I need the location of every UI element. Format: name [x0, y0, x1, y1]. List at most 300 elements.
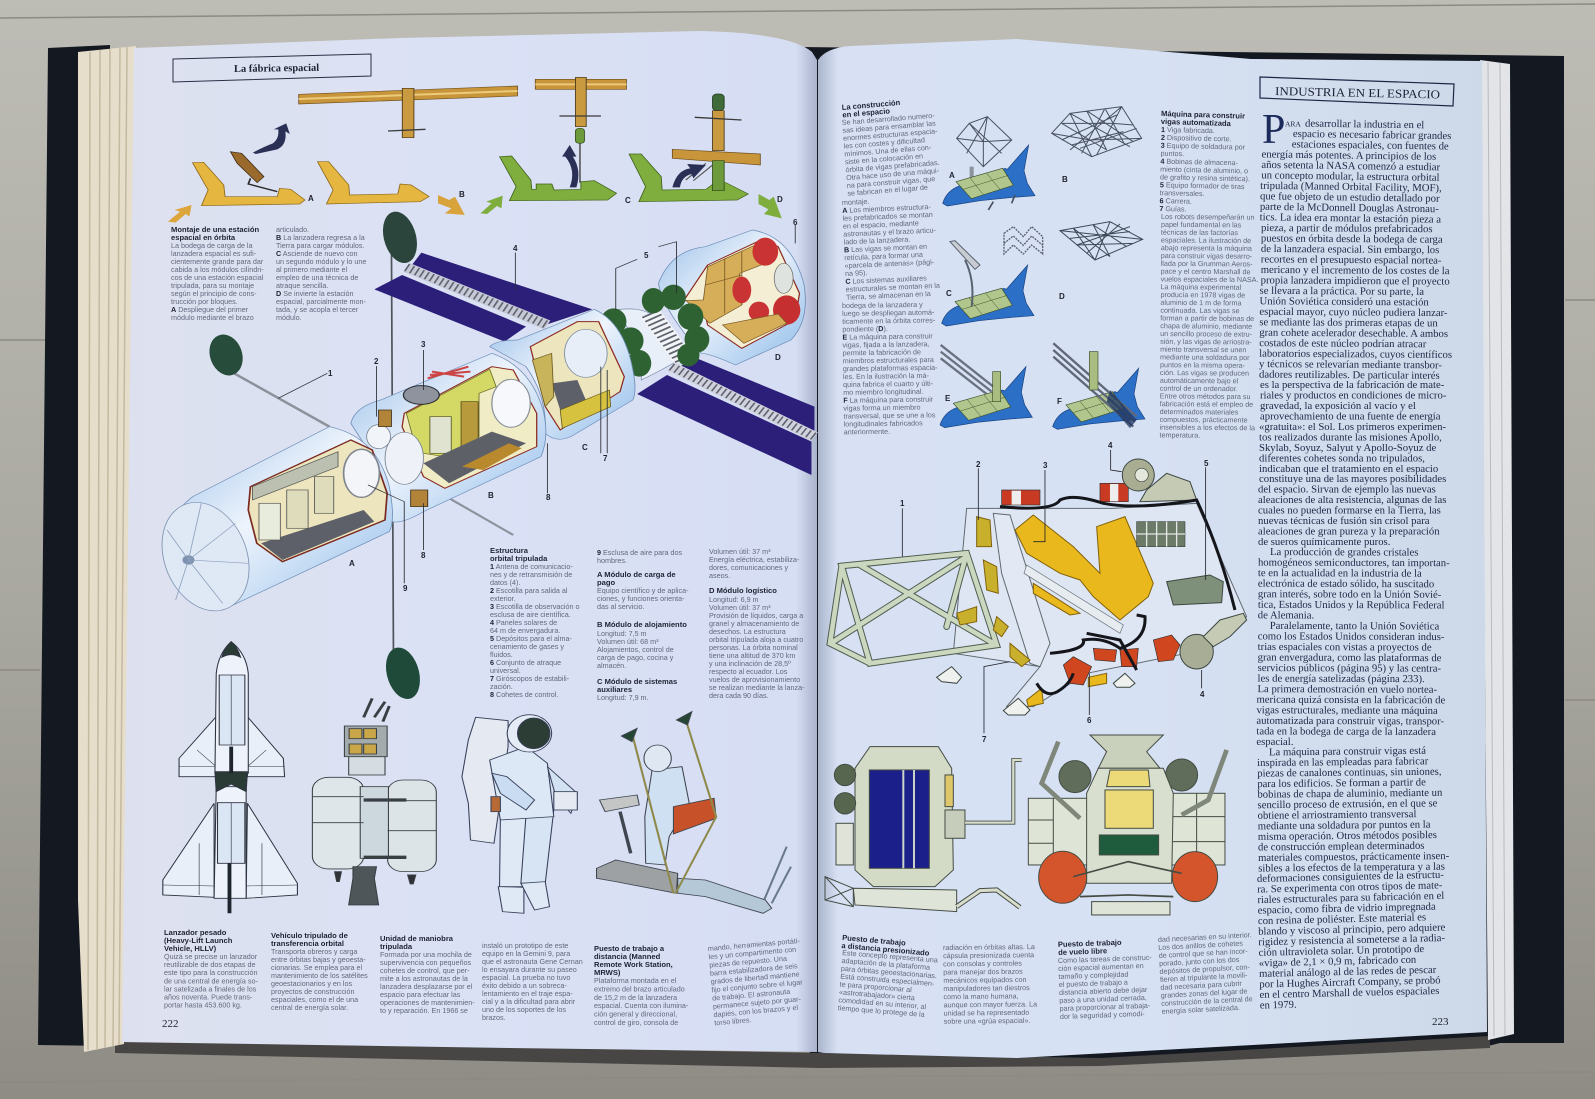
main article text: Skylab, Soyuz, Salyut y Apollo-Soyuz de	[1259, 442, 1436, 454]
station part labels: 3	[421, 340, 426, 349]
text block: Máquina para construir vigas automatizada: puntos en la misma opera-	[1160, 360, 1246, 370]
drop cap: P	[1262, 107, 1285, 153]
column bottom: tica, Estados Unidos y la República Federal	[1258, 599, 1445, 611]
caption: Vehículo tripulado: mantenimiento de los satélites	[271, 971, 368, 980]
text block: Montaje de una estación espacial en órbita: según el principio de cons-	[171, 289, 257, 298]
text block: Estructura orbital tripulada: nes y de retransmisión de	[490, 570, 572, 579]
caption: Lanzador pesado: reutilizable de dos etapas de	[164, 960, 256, 969]
caption: Unidad de maniobra tripulada: lo ensayara durante su paseo	[482, 965, 577, 974]
machine part labels: 6	[1087, 716, 1092, 725]
text block: La construcción en el espacio: lado de la lanzadera.	[843, 235, 910, 246]
column top: parte de la McDonnell Douglas Astronau-	[1260, 201, 1439, 215]
labels of construction methods: F	[1057, 397, 1062, 406]
caption: Puesto de trabajo a distancia: control de giro, consola de	[594, 1018, 678, 1027]
caption: Vehículo tripulado: proyectos de construcción	[271, 987, 355, 996]
column top: ARA	[1285, 119, 1302, 129]
main article text: «gratuita»: el Sol. Los primeros experimen-	[1259, 421, 1446, 433]
text block: La construcción en el espacio: na para construir vigas, que	[846, 174, 936, 190]
text block: La construcción en el espacio: Tierra, se almacenan en la	[846, 289, 931, 302]
text block: módulos A B C: das al servicio.	[597, 602, 645, 611]
caption: Puesto de trabajo a distancia presionizado: radiación en órbitas altas. La	[943, 942, 1035, 952]
text block: Máquina para construir vigas automatizada: para construir vigas desarro-	[1161, 251, 1253, 261]
text block: módulo D: Longitud: 6,9 m	[709, 595, 759, 604]
column bottom: vigas estructurales, mediante una máquina	[1256, 704, 1438, 717]
column top: años setenta la NASA comenzó a estudiar	[1261, 159, 1441, 173]
caption: Puesto de trabajo a distancia: de 15,2 m de la lanzadera	[594, 993, 677, 1002]
caption: Puesto de trabajo de vuelo libre: depósitos de propulsor, con-	[1159, 962, 1251, 976]
main article text: del espacio. Sirvan de ejemplo las nuevas	[1258, 484, 1436, 496]
caption: Unidad de maniobra tripulada: cohetes de control, que per-	[380, 966, 470, 975]
grid panel	[1137, 522, 1185, 547]
text block: La construcción en el espacio: B Las vigas se montan en	[844, 242, 927, 254]
text block: módulo D: Volumen útil: 37 m³	[709, 603, 771, 612]
caption: Puesto de trabajo a distancia: mando, herramientas portáti-	[707, 936, 801, 953]
text block: Montaje de una estación espacial en órbita: D Se invierte la estación	[276, 289, 354, 298]
text block: La construcción en el espacio: permite la fabricación de	[843, 347, 921, 357]
right page	[818, 39, 1487, 1058]
text block: Máquina para construir vigas automatizada: forman a partir de bobinas de	[1160, 313, 1254, 323]
text block: Montaje de una estación espacial en órbita: cientemente grande para dar	[171, 257, 264, 266]
column bottom: espacial.	[1256, 736, 1293, 748]
station part labels: D	[775, 353, 781, 362]
heavy-lift launch vehicle	[163, 642, 297, 913]
text block: Estructura orbital tripulada: Estructura	[490, 546, 529, 555]
text block: La construcción en el espacio: na 95).	[845, 268, 868, 278]
text block: La construcción en el espacio: Otra hace uso de una máqui-	[846, 166, 940, 182]
text block: Máquina para construir vigas automatizada: vuelos espaciales de la NASA.	[1161, 274, 1259, 284]
text block: Montaje de una estación espacial en órbita: módulo mediante el brazo	[171, 313, 254, 322]
caption: Puesto de trabajo de vuelo libre: Los dos anillos de cohetes	[1158, 939, 1244, 952]
labels of assembly sequence: D	[777, 195, 783, 204]
main article text: rigidez y resistencia al someterse a la radia-	[1258, 932, 1446, 948]
text block: La construcción en el espacio: mínimos. Una de ellas con-	[844, 143, 932, 158]
text block: Máquina para construir vigas automatizada: vigas automatizada	[1161, 117, 1232, 128]
mast and dishes	[205, 210, 513, 701]
text block: La construcción en el espacio: F La máquina para construir	[843, 395, 933, 405]
text block: módulo D: dores, comunicaciones y	[709, 563, 789, 572]
text block: Estructura orbital tripulada: orbital tripulada	[490, 554, 548, 563]
A: tetrahedral structure	[943, 117, 1035, 210]
text block: módulo D: Energía eléctrica, estabiliza-	[709, 555, 800, 564]
caption: Puesto de trabajo a distancia presionizado: cápsula presionizada cuenta	[943, 950, 1034, 960]
machine part labels	[900, 441, 1209, 744]
B: assembled lattice	[1052, 107, 1142, 157]
column bottom: mericana quizá consista en la fabricación de	[1256, 694, 1445, 706]
caption: Puesto de trabajo a distancia presionizado: a distancia presionizado	[841, 941, 930, 958]
machine part labels: 4	[1200, 690, 1205, 699]
labels of construction methods: E	[945, 394, 951, 403]
caption: Vehículo tripulado: Vehículo tripulado de	[271, 931, 348, 940]
text block: La construcción en el espacio: pondiente (D).	[842, 324, 888, 334]
station part labels: 9	[403, 584, 408, 593]
caption: Unidad de maniobra tripulada: lentamiento en el traje espa-	[482, 989, 573, 998]
F: beam machine with transversal	[1053, 343, 1145, 429]
machine frame and panels	[953, 503, 1247, 707]
text block: Estructura orbital tripulada: exterior.	[490, 594, 516, 603]
text block: La construcción en el espacio: miembros estructurales para	[843, 355, 934, 365]
text block: módulos A B C	[597, 548, 689, 702]
arrows	[168, 123, 782, 223]
text block: módulos A B C: Longitud: 7,9 m.	[597, 693, 649, 702]
text block: Estructura orbital tripulada: cenamiento de gases y	[490, 642, 564, 651]
text block: módulos A B C: Longitud: 7,5 m	[597, 629, 647, 638]
caption: Puesto de trabajo de vuelo libre: Como las tareas de construc-	[1058, 953, 1152, 965]
main article text: por la Hughes Aircraft Company, se probó	[1259, 974, 1441, 990]
caption: Unidad de maniobra tripulada: éxito debido a un sobreca-	[482, 981, 567, 990]
column bottom: trias espaciales con vistas a proyectos de	[1258, 641, 1432, 654]
solar panels	[374, 253, 814, 475]
text block: Montaje de una estación espacial en órbita: tripulada, para su montaje	[171, 281, 254, 290]
text block: Montaje de una estación espacial en órbita: trucción por bloques.	[171, 297, 238, 306]
caption: Puesto de trabajo a distancia: Puesto de trabajo a	[594, 944, 665, 953]
lower red boxes	[1063, 635, 1180, 685]
right page heading: Industria en el espacio	[1260, 77, 1454, 106]
page number 223: 223	[1432, 1016, 1449, 1028]
caption: Unidad de maniobra tripulada: que el astronauta Gene Cernan	[482, 957, 583, 966]
text block: La construcción en el espacio: vigas forma un miembro	[843, 403, 921, 413]
column top: tripulada (Manned Orbital Facility, MOF),	[1260, 180, 1442, 194]
main article text: diferentes cohetes sonda no tripulados,	[1259, 452, 1425, 464]
machine part labels: 4	[1108, 441, 1113, 450]
main article text: aleaciones de gran pureza y la preparación	[1258, 526, 1440, 538]
column top: energía más potentes. A principios de los	[1262, 148, 1436, 163]
caption: Puesto de trabajo de vuelo libre: grandes zonas del lugar de	[1161, 986, 1248, 1000]
caption: Puesto de trabajo de vuelo libre: ción espacial aumentan en	[1058, 961, 1144, 973]
column bottom: de Alemania.	[1258, 609, 1314, 621]
main article text: obtiene el arriostramiento transversal	[1258, 808, 1416, 822]
main article text: aleaciones de alta resistencia, algunas de las	[1258, 494, 1446, 506]
main article text: riales y productos en condiciones de micro-	[1260, 389, 1447, 401]
text block: Máquina para construir vigas automatizada: sión, y las vigas de arriostra-	[1160, 337, 1252, 346]
feet	[937, 667, 1135, 715]
box 5	[1167, 575, 1223, 605]
caption: Unidad de maniobra tripulada: espacio para efectuar las	[380, 990, 461, 999]
text block: módulo D: desechos. La estructura	[709, 627, 786, 636]
column top: tics. La idea era montar la estación pieza a	[1260, 211, 1441, 226]
column bottom: gran interés, sobre todo en la Unión Sovié-	[1258, 588, 1442, 601]
illustration: assembly sequence of shuttles and station	[168, 77, 782, 223]
column top: un concepto modular, la estructura orbital	[1261, 169, 1440, 184]
text block: La construcción en el espacio: siste en la colocación en	[845, 151, 923, 166]
caption: Puesto de trabajo de vuelo libre: fieren al tripulante la movili-	[1160, 970, 1248, 984]
main article text	[1256, 107, 1453, 1012]
text block: La construcción en el espacio: grandes plataformas espacia-	[843, 363, 938, 373]
caption: Lanzador pesado: Vehicle, HLLV)	[164, 944, 217, 953]
caption: Puesto de trabajo a distancia presionizado: para órbitas geoestacionarias.	[841, 964, 937, 980]
caption: Puesto de trabajo a distancia: fijo el conjunto sobre el lugar	[711, 977, 804, 994]
main article text: nuevas técnicas de fusión sin crisol para	[1258, 515, 1430, 527]
main article text: indicaban que el tratamiento en el espacio	[1259, 463, 1438, 475]
main article text: constituye una de las mayores posibilidades	[1259, 473, 1446, 485]
caption: Puesto de trabajo de vuelo libre: el puesto de trabajo a	[1059, 978, 1128, 989]
text block: Estructura orbital tripulada: esclusa de aire científica.	[490, 610, 571, 619]
text block: módulo D: D Módulo logístico	[709, 586, 777, 595]
text block: La construcción en el espacio: A Los miembros estructura-	[842, 202, 931, 215]
caption: Puesto de trabajo a distancia presionizado: mecánicos equipados con	[943, 975, 1026, 985]
caption: Puesto de trabajo a distancia: les y un compartimento con	[708, 945, 796, 961]
main article text: piezas de canalones continuas, sin uniones,	[1257, 766, 1442, 780]
text block: La construcción en el espacio: sas ideas para ensamblar las	[842, 119, 936, 135]
machine part labels: 2	[976, 460, 981, 469]
text block: Montaje de una estación espacial en órbita: al primero mediante el	[276, 265, 348, 274]
main article text: «viga» de 2,1 × 0,9 m, fabricado con	[1259, 954, 1417, 969]
text block: La construcción en el espacio: La construcción	[841, 98, 901, 112]
text block: Montaje de una estación espacial en órbita: tada, y se acopla el tercer	[276, 305, 359, 314]
text block: Máquina para construir vigas automatizada: 6 Carrera.	[1159, 196, 1192, 206]
text block: Montaje de una estación espacial en órbita: A Despliegue del primer	[171, 305, 248, 314]
caption: Puesto de trabajo a distancia presionizado: Este concepto representa una	[842, 948, 938, 965]
text block: Máquina para construir vigas automatizada: Los robots desempeñarán un	[1161, 212, 1255, 222]
main article text: se llevara a la práctica. Por su parte, la	[1260, 285, 1424, 298]
left page	[122, 31, 817, 1052]
caption: Unidad de maniobra tripulada: supervivencia con pequeños	[380, 958, 472, 967]
text block: Máquina para construir vigas automatizada: espaciales. La ilustración de	[1161, 235, 1251, 245]
text block: La construcción en el espacio: enormes estructuras espacia-	[843, 126, 938, 143]
text block: Máquina para construir vigas automatizada: continuada. Las vigas se	[1160, 306, 1240, 315]
caption: Lanzador pesado: de una central de energía so-	[164, 976, 259, 985]
text block: Montaje de una estación espacial en órbita: articulado.	[276, 225, 309, 234]
text block: La construcción en el espacio: les prefabricados se montan	[842, 210, 933, 223]
labels of construction methods: D	[1059, 292, 1065, 301]
main article text: ción ultravioleta solar. Un prototipo de	[1258, 943, 1425, 959]
caption: Puesto de trabajo de vuelo libre	[1058, 930, 1256, 1021]
caption: Lanzador pesado: lar satelizada a finales de los	[164, 984, 257, 993]
text block: Máquina para construir vigas automatizada: 5 Equipo formador de tiras	[1160, 180, 1245, 191]
main article text: sibles a los efectos de la temperatura y a las	[1258, 861, 1445, 875]
text block: módulos A B C: C Módulo de sistemas	[597, 677, 677, 686]
illustrations: bottom vehicles, left page	[163, 642, 791, 913]
text block: Máquina para construir vigas automatizada: transversales.	[1160, 188, 1205, 198]
text block: módulos A B C: almacén.	[597, 661, 626, 670]
column top: espacio es necesario fabricar grandes	[1293, 128, 1451, 142]
main article text: de la lanzadera espacial. Sin embargo, los	[1261, 243, 1439, 256]
astronaut MMU	[462, 715, 577, 913]
yellow shuttle 2	[317, 162, 429, 204]
caption: Puesto de trabajo a distancia presionizado: aunque con mayor fuerza. La	[944, 999, 1037, 1009]
text block: Máquina para construir vigas automatizada: miento (cinta de aluminio, o	[1160, 164, 1248, 175]
text block: Máquina para construir vigas automatizada	[1159, 109, 1259, 440]
main article text: aprovechamiento de una fuente de energía	[1260, 410, 1441, 422]
text block: Estructura orbital tripulada: 8 Cohetes de control.	[490, 690, 558, 699]
station part labels: 7	[603, 454, 608, 463]
text block: Máquina para construir vigas automatizada: producía en 1978 vigas de	[1160, 290, 1245, 300]
main article text: pieza, a partir de módulos prefabricados	[1261, 222, 1433, 235]
text block: módulo D: tiene una altitud de 370 km	[709, 651, 795, 660]
left page stack	[78, 46, 136, 1052]
main article text: para los edificios. Se forman a partir de	[1257, 776, 1426, 790]
text block: Montaje de una estación espacial en órbita: Tierra para cargar módulos.	[276, 241, 364, 250]
caption: Puesto de trabajo a distancia: MRWS)	[594, 968, 621, 977]
text block: Estructura orbital tripulada: 3 Escotilla de observación o	[490, 602, 580, 611]
main article text: deformaciones consiguientes de la estructu-	[1257, 869, 1444, 885]
C: folded structure and deployment	[942, 227, 1043, 326]
text block: Máquina para construir vigas automatizada: ción. Las vigas se producen	[1160, 368, 1249, 378]
caption: Lanzador pesado: (Heavy-Lift Launch	[164, 936, 233, 945]
main article text: se mediante las dos primeras etapas de un	[1259, 316, 1438, 329]
caption: Puesto de trabajo a distancia: distancia (Manned	[594, 952, 661, 961]
text block: módulos A B C: B Módulo de alojamiento	[597, 620, 687, 629]
main article text: sencillo proceso de extrusión, en el que se	[1257, 797, 1438, 811]
caption: Unidad de maniobra tripulada: cial y a la dificultad para abrir	[482, 997, 576, 1006]
text block: Estructura orbital tripulada: 5 Depósitos para el alma-	[490, 634, 572, 643]
caption: Vehículo tripulado: cionarias. Se emplea para el	[271, 963, 362, 972]
text block: Montaje de una estación espacial en órbita: un segundo módulo y lo une	[276, 257, 366, 266]
text block: Máquina para construir vigas automatizada: chapa de aluminio, mediante	[1160, 321, 1252, 331]
main article text: es la perspectiva de la fabricación de mate-	[1260, 379, 1445, 391]
text block: módulos A B C: auxiliares	[597, 685, 632, 694]
text block: módulos A B C: Alojamientos, control de	[597, 645, 674, 654]
module D: logistics	[658, 230, 805, 365]
column bottom: servicios públicos (página 95) y las centra-	[1258, 662, 1441, 675]
text block: La construcción en el espacio: mo miembro longitudinal.	[843, 387, 924, 397]
column bottom: tada en la bodega de carga de la lanzadera	[1256, 725, 1436, 738]
text block: La construcción en el espacio: montaje.	[842, 197, 870, 207]
caption: Puesto de trabajo a distancia presionizado: «astrotrabajador» cierta	[839, 987, 915, 1002]
text block: Máquina para construir vigas automatizada: insensibles a los efectos de la	[1160, 423, 1255, 432]
text block: Máquina para construir vigas automatizada: llada por la Grumman Aeros-	[1161, 259, 1253, 268]
text block: La construcción en el espacio: vigas, fijada a la lanzadera,	[842, 339, 930, 349]
text block: módulo D: y una inclinación de 28,5º	[709, 659, 791, 668]
text block: La construcción en el espacio: les con costes y dificultad	[843, 135, 925, 151]
caption: Lanzador pesado: Quizá se precise un lanzador	[164, 952, 258, 961]
caption: Vehículo tripulado: central de energía solar.	[271, 1003, 348, 1012]
left page heading: La fábrica espacial: La fábrica espacial	[234, 63, 319, 75]
left page heading: La fábrica espacial	[173, 54, 371, 82]
text block: Máquina para construir vigas automatizada: control de un ordenador.	[1160, 384, 1238, 393]
column bottom: electrónica de estado sólido, ha suscitado	[1258, 578, 1434, 590]
main article text: laboratorios especializados, cuyos científicos	[1259, 348, 1452, 361]
caption: Unidad de maniobra tripulada: tripulada	[380, 942, 413, 951]
first module on arm	[230, 152, 264, 183]
text block: Máquina para construir vigas automatizada: miento transversal se unen	[1160, 345, 1246, 354]
caption: Puesto de trabajo a distancia presionizado: sobre una «grúa espacial».	[944, 1016, 1031, 1026]
text block: módulos A B C: carga de pago, cocina y	[597, 653, 674, 662]
text block: módulo D: orbital tripulada aloja a cuatro	[709, 635, 803, 644]
caption: Puesto de trabajo a distancia: barra estabilizadora de seis	[710, 961, 798, 978]
caption: Puesto de trabajo de vuelo libre: tamaño y complejidad	[1058, 970, 1129, 981]
text block: Estructura orbital tripulada: zación.	[490, 682, 513, 691]
main article text: La máquina para construir vigas está	[1269, 745, 1426, 758]
text block: La construcción en el espacio	[841, 98, 943, 436]
caption: Puesto de trabajo a distancia presionizado	[838, 933, 1037, 1026]
caption: Unidad de maniobra tripulada: mite a los astronautas de la	[380, 974, 468, 983]
text block: Montaje de una estación espacial en órbita: cabida a los módulos cilíndri-	[171, 265, 264, 274]
text block: módulos A B C: Equipo científico y de aplica-	[597, 586, 689, 595]
text block: Estructura orbital tripulada: datos (4).	[490, 578, 520, 587]
text block: La construcción en el espacio: longitudinales fabricados	[844, 418, 923, 428]
column bottom: homogéneos semiconductores, tan importan-	[1258, 557, 1450, 569]
text block: La construcción en el espacio: luego se despliegan automá-	[842, 308, 935, 318]
module A: payload	[150, 427, 392, 617]
main article text: propia lanzadera impidieron que el proyecto	[1261, 274, 1450, 288]
module C: auxiliary systems	[490, 309, 635, 439]
green shuttle 2	[629, 154, 748, 202]
caption: Puesto de trabajo a distancia: dapiés, con los brazos y el	[713, 1003, 799, 1019]
caption: Vehículo tripulado: transferencia orbital	[271, 939, 344, 948]
machine part labels: 7	[982, 735, 987, 744]
station part labels: 5	[644, 251, 649, 260]
cables	[1000, 497, 1235, 694]
text block: Estructura orbital tripulada: 2 Escotilla para salida al	[490, 586, 568, 595]
caption: Unidad de maniobra tripulada: uno de los soportes de los	[482, 1005, 566, 1014]
caption: Puesto de trabajo de vuelo libre: dad necesarias en su interior.	[1158, 930, 1252, 944]
station truss 2	[535, 77, 626, 183]
caption: Vehículo tripulado: Transporta obreros y carga	[271, 947, 357, 956]
text block: módulo D: aseos.	[709, 571, 730, 580]
caption: Unidad de maniobra tripulada: brazos.	[482, 1013, 506, 1022]
leader lines	[278, 225, 795, 583]
labels of construction methods	[945, 171, 1068, 406]
text block: La construcción en el espacio: se fabrican en el lugar de	[847, 183, 928, 198]
caption: Puesto de trabajo a distancia: extremo del brazo articulado	[594, 984, 685, 993]
pressurised workstation	[825, 747, 1022, 912]
column top: estaciones espaciales, con fuentes de	[1292, 138, 1449, 153]
text block: módulo D: se realizan mediante la lanza-	[709, 683, 805, 692]
connector and tanks	[601, 285, 709, 380]
station part labels: 4	[513, 244, 518, 253]
caption: Puesto de trabajo a distancia: Remote Work Station,	[594, 960, 673, 969]
module B: living quarters	[351, 353, 546, 522]
column bottom: Paralelamente, tanto la Unión Soviética	[1270, 620, 1439, 632]
text block: Montaje de una estación espacial en órbita: atraque sencilla.	[276, 281, 328, 290]
green shuttle 1	[500, 156, 617, 201]
main article text: dadores reutilizables. De particular interés	[1259, 369, 1440, 382]
caption: Unidad de maniobra tripulada: Formada por una mochila de	[380, 950, 472, 959]
text block: módulo D	[709, 547, 805, 700]
text block: Máquina para construir vigas automatizada: 1 Viga fabricada.	[1161, 125, 1215, 135]
caption: Puesto de trabajo a distancia: de trabajo. El astronauta	[712, 987, 791, 1003]
labels of construction methods: A	[949, 171, 955, 180]
text block: Máquina para construir vigas automatizada: mediante una soldadura por	[1160, 352, 1250, 362]
station part labels: 8	[546, 493, 551, 502]
free-flying workstation	[1028, 735, 1227, 915]
column bottom: La producción de grandes cristales	[1270, 546, 1418, 559]
machine part labels: 3	[1043, 461, 1048, 470]
caption: Puesto de trabajo a distancia presionizado: como la mano humana,	[943, 991, 1019, 1001]
text block: La construcción en el espacio: E La máquina para construir	[842, 331, 933, 342]
caption: Puesto de trabajo a distancia presionizado: Puesto de trabajo	[842, 933, 906, 948]
text block: Montaje de una estación espacial en órbita: La bodega de carga de la	[171, 241, 253, 250]
text block: La construcción en el espacio: en el espacio, mediante	[843, 218, 919, 231]
text block: Montaje de una estación espacial en órbita: espacial en órbita	[171, 233, 236, 242]
text block: módulos A B C: 9 Esclusa de aire para dos	[597, 548, 682, 557]
text block: Máquina para construir vigas automatizada: temperatura.	[1159, 430, 1200, 440]
main article text: espacio, como fibra de vidrio impregnada	[1258, 901, 1436, 917]
text block: Máquina para construir vigas automatizada: puntos.	[1160, 149, 1184, 158]
main article text: con resina de poliéster. Este material es	[1258, 911, 1426, 927]
illustration: beam builder machine and workstations	[825, 450, 1247, 915]
caption: Vehículo tripulado	[271, 931, 368, 1012]
caption: Puesto de trabajo a distancia presionizado: para manejar dos brazos	[943, 967, 1023, 977]
text block: Montaje de una estación espacial en órbita: módulo.	[276, 313, 302, 322]
main article text: gravedad, la exposición al vacío y el	[1260, 400, 1416, 412]
caption: Puesto de trabajo a distancia presionizado: te para proporcionar al	[839, 980, 913, 994]
caption: Lanzador pesado: portar hasta 453.600 kg.	[164, 1001, 242, 1010]
remote work station	[597, 712, 791, 913]
text block: módulo D: granel y almacenamiento de	[709, 619, 799, 628]
caption: Puesto de trabajo de vuelo libre: de vuelo libre	[1058, 946, 1107, 957]
leader lines	[902, 450, 1206, 733]
caption: Puesto de trabajo a distancia: ción general y direccional,	[594, 1010, 677, 1019]
text block: Máquina para construir vigas automatizada: 2 Dispositivo de corte.	[1161, 133, 1232, 143]
text block: Máquina para construir vigas automatizada: compuestos, prácticamente	[1160, 415, 1248, 424]
labels of assembly sequence: C	[625, 196, 631, 205]
text block: Máquina para construir vigas automatizada: técnicas de las factorías	[1161, 228, 1238, 237]
text block: Máquina para construir vigas automatizada: 3 Equipo de soldadura por	[1161, 141, 1245, 152]
text block: módulos A B C: ciones, y funciones orienta-	[597, 594, 685, 603]
caption: Unidad de maniobra tripulada: to y reparación. En 1966 se	[380, 1006, 468, 1015]
main article text: costados de este núcleo podrían atracar	[1259, 337, 1427, 350]
